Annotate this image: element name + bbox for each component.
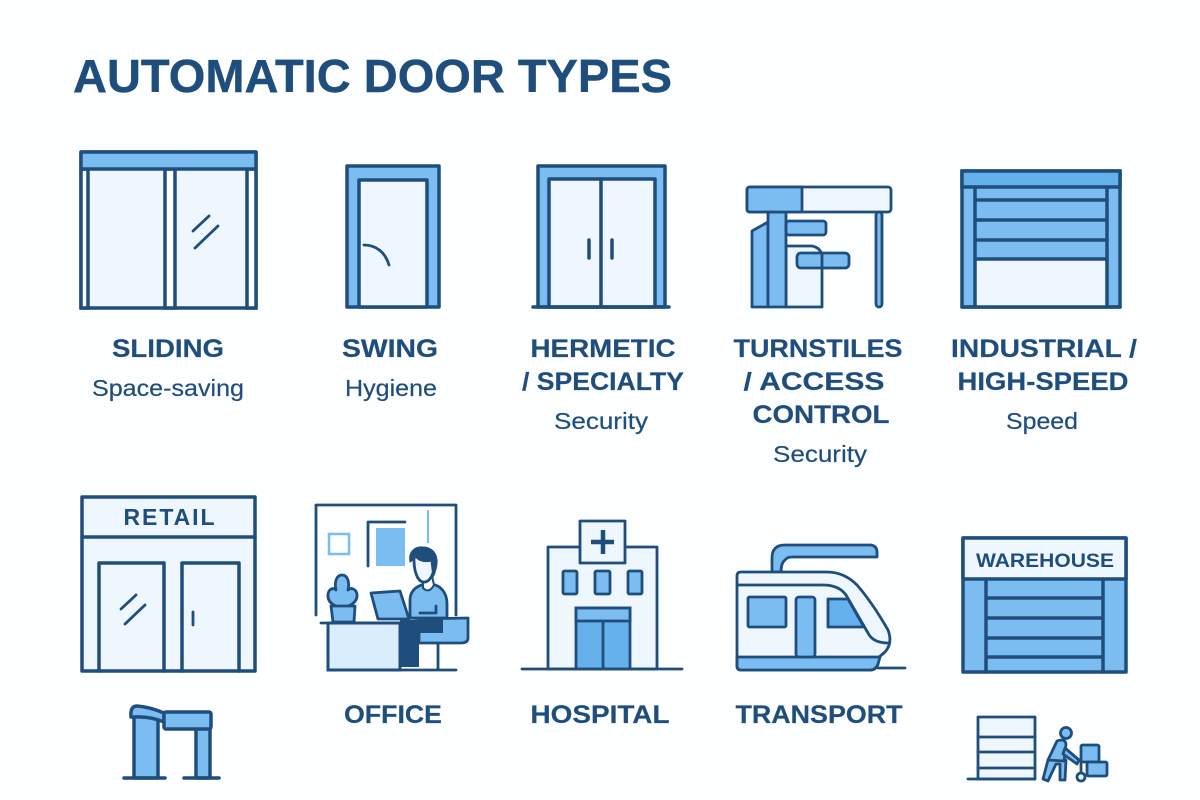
sign text: retail: RETAIL	[124, 504, 214, 530]
label: hermetic / specialty: / SPECIALTY	[522, 368, 684, 396]
panel: industrial / high-speed	[951, 171, 1137, 434]
icon: retail storefront	[82, 497, 255, 671]
icon: shelving and worker with cart	[968, 717, 1107, 781]
icon: high-speed door	[962, 171, 1120, 307]
panel: retail	[82, 497, 255, 778]
icon: swing door	[347, 166, 439, 307]
panel: transport	[736, 545, 905, 729]
sublabel: security: Security	[773, 441, 868, 467]
icon: train	[737, 545, 905, 670]
label: hermetic / specialty: HERMETIC	[530, 335, 676, 363]
label: turnstiles / access control: CONTROL	[752, 401, 890, 429]
label: turnstiles / access control: TURNSTILES	[734, 335, 902, 363]
icon: retail gate	[124, 706, 219, 778]
label: industrial / high-speed	[951, 335, 1137, 396]
sublabel: hygiene: Hygiene	[345, 375, 437, 401]
label: industrial / high-speed: INDUSTRIAL /	[951, 335, 1137, 363]
title: AUTOMATIC DOOR TYPES	[73, 50, 672, 102]
label: turnstiles / access control: / ACCESS	[744, 368, 884, 396]
icon: turnstile	[747, 187, 891, 307]
icon: hospital building	[522, 521, 682, 669]
panel: warehouse	[963, 538, 1126, 781]
panel: turnstiles / access control	[734, 187, 902, 467]
panel: swing	[342, 166, 439, 401]
icon: hermetic door	[533, 166, 669, 307]
label: industrial / high-speed: HIGH-SPEED	[958, 368, 1128, 396]
label: office: OFFICE	[344, 701, 442, 729]
label: swing: SWING	[342, 335, 438, 363]
panel: hermetic / specialty	[522, 166, 684, 434]
sublabel: security: Security	[554, 408, 649, 434]
panel: office	[316, 505, 468, 729]
label: hermetic / specialty	[522, 335, 684, 396]
label: transport: TRANSPORT	[736, 701, 902, 729]
sublabel: space-saving: Space-saving	[92, 375, 244, 401]
label: sliding: SLIDING	[112, 335, 224, 363]
label: hospital: HOSPITAL	[530, 701, 670, 729]
sign text: warehouse: WAREHOUSE	[976, 550, 1114, 572]
panel: sliding	[81, 152, 256, 401]
label: turnstiles / access control	[734, 335, 902, 429]
sublabel: speed: Speed	[1006, 408, 1078, 434]
panel: hospital	[522, 521, 682, 729]
icon: office scene	[316, 505, 468, 670]
icon: warehouse building	[963, 538, 1126, 672]
icon: sliding door	[81, 152, 256, 308]
